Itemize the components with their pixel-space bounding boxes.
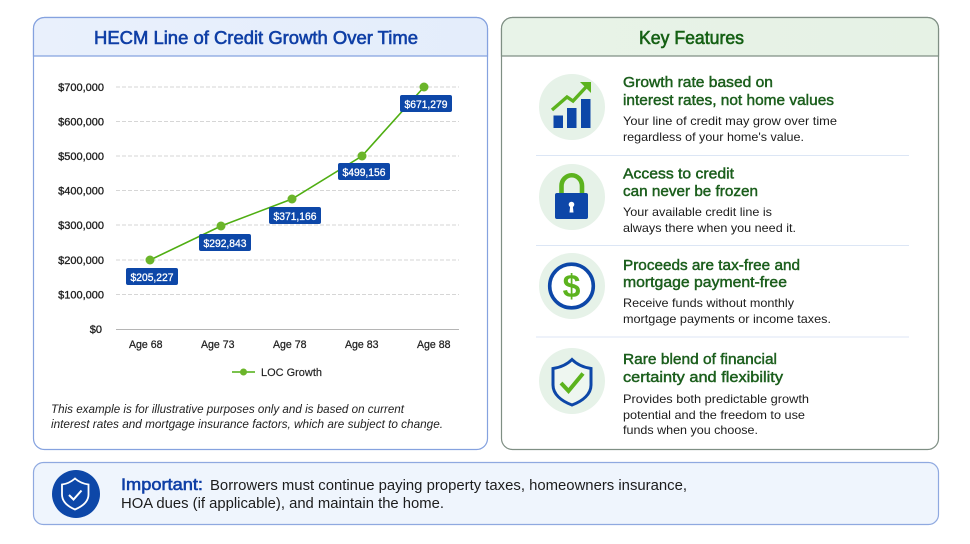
feature text: tax-free proceeds: Receive funds without monthly [623,296,794,310]
feature text: growth rate: Your line of credit may grow over time [623,114,837,128]
feature text: tax-free proceeds: mortgage payment-free [623,275,787,291]
icon: shield badge [52,470,100,518]
feature text: tax-free proceeds [623,258,831,326]
value label: age 78: $371,166 [274,211,316,223]
feature text: credit access [623,166,796,235]
y axis labels: $400,000 [58,186,104,198]
feature text: credit access: always there when you need it. [623,221,796,235]
value label: age 68: $205,227 [130,272,174,284]
x axis labels: Age 88 [417,339,450,351]
feature: financial certainty [539,348,809,437]
feature text: credit access: Your available credit line is [623,205,772,219]
callout text: HOA dues (if applicable), and maintain the home. [121,495,444,512]
feature text: tax-free proceeds: mortgage payments or income taxes. [623,312,831,326]
x axis labels: Age 68 [129,339,162,351]
feature text: credit access: Access to credit [623,166,734,182]
callout text [121,475,687,512]
x axis labels: Age 73 [201,339,234,351]
heading: key features: Key Features [639,28,744,48]
feature text: financial certainty: potential and the freedom to use [623,408,805,422]
feature text: financial certainty: Rare blend of financial [623,352,777,368]
value label: age 88: $671,279 [404,99,448,111]
chart legend [232,367,322,379]
y axis labels: $600,000 [58,116,104,128]
panel: key features [502,18,938,450]
value label: age 88 [400,95,452,112]
value label: age 68 [126,268,178,285]
y axis labels: $200,000 [58,255,104,267]
feature: credit access [539,164,796,235]
icon: dollar coin: $ [563,268,581,304]
callout: important notice [34,462,938,524]
disclaimer note: interest rates and mortgage insurance factors, which are subject to change. [51,417,443,431]
feature text: growth rate [623,75,837,144]
feature text: credit access: can never be frozen [623,184,758,200]
feature text: financial certainty [623,352,809,437]
icon: growth chart [539,74,605,140]
x axis labels [129,339,450,351]
value label: age 83: $499,156 [342,167,386,179]
x axis labels: Age 78 [273,339,306,351]
value label: age 73: $292,843 [204,238,246,250]
icon: dollar coin [539,253,605,319]
panel header: chart [34,18,488,56]
y axis labels: $700,000 [58,82,104,94]
icon: shield check [539,348,605,414]
feature: growth rate [539,74,837,144]
disclaimer note: This example is for illustrative purposes only and is based on current [51,402,405,416]
icon: padlock [539,164,605,230]
feature text: financial certainty: Provides both predictable growth [623,392,809,406]
value label: age 78 [269,207,321,224]
feature text: growth rate: interest rates, not home values [623,93,834,109]
feature text: growth rate: Growth rate based on [623,75,773,91]
feature text: tax-free proceeds: Proceeds are tax-free and [623,258,800,274]
y axis labels: $100,000 [58,290,104,302]
feature text: growth rate: regardless of your home's value. [623,130,804,144]
line chart [58,82,459,351]
data line: LOC growth [146,82,428,264]
callout text: Borrowers must continue paying property taxes, homeowners insurance, [210,477,687,494]
x axis labels: Age 83 [345,339,378,351]
feature: tax-free proceeds [539,253,831,326]
panel: line of credit chart [34,18,488,450]
heading: chart title: HECM Line of Credit Growth Over Time [94,28,418,48]
panel header: key features [502,18,938,56]
callout text: Important: [121,475,203,494]
y axis labels: $300,000 [58,220,104,232]
chart legend: LOC Growth [261,367,322,379]
y axis labels: $500,000 [58,151,104,163]
y axis labels: $0 [90,324,102,336]
disclaimer note [51,402,443,431]
feature text: financial certainty: certainty and flexibility [623,370,784,386]
feature text: financial certainty: funds when you choose. [623,423,758,437]
value label: age 73 [199,234,251,251]
y axis labels [58,82,104,336]
value label: age 83 [338,163,390,180]
